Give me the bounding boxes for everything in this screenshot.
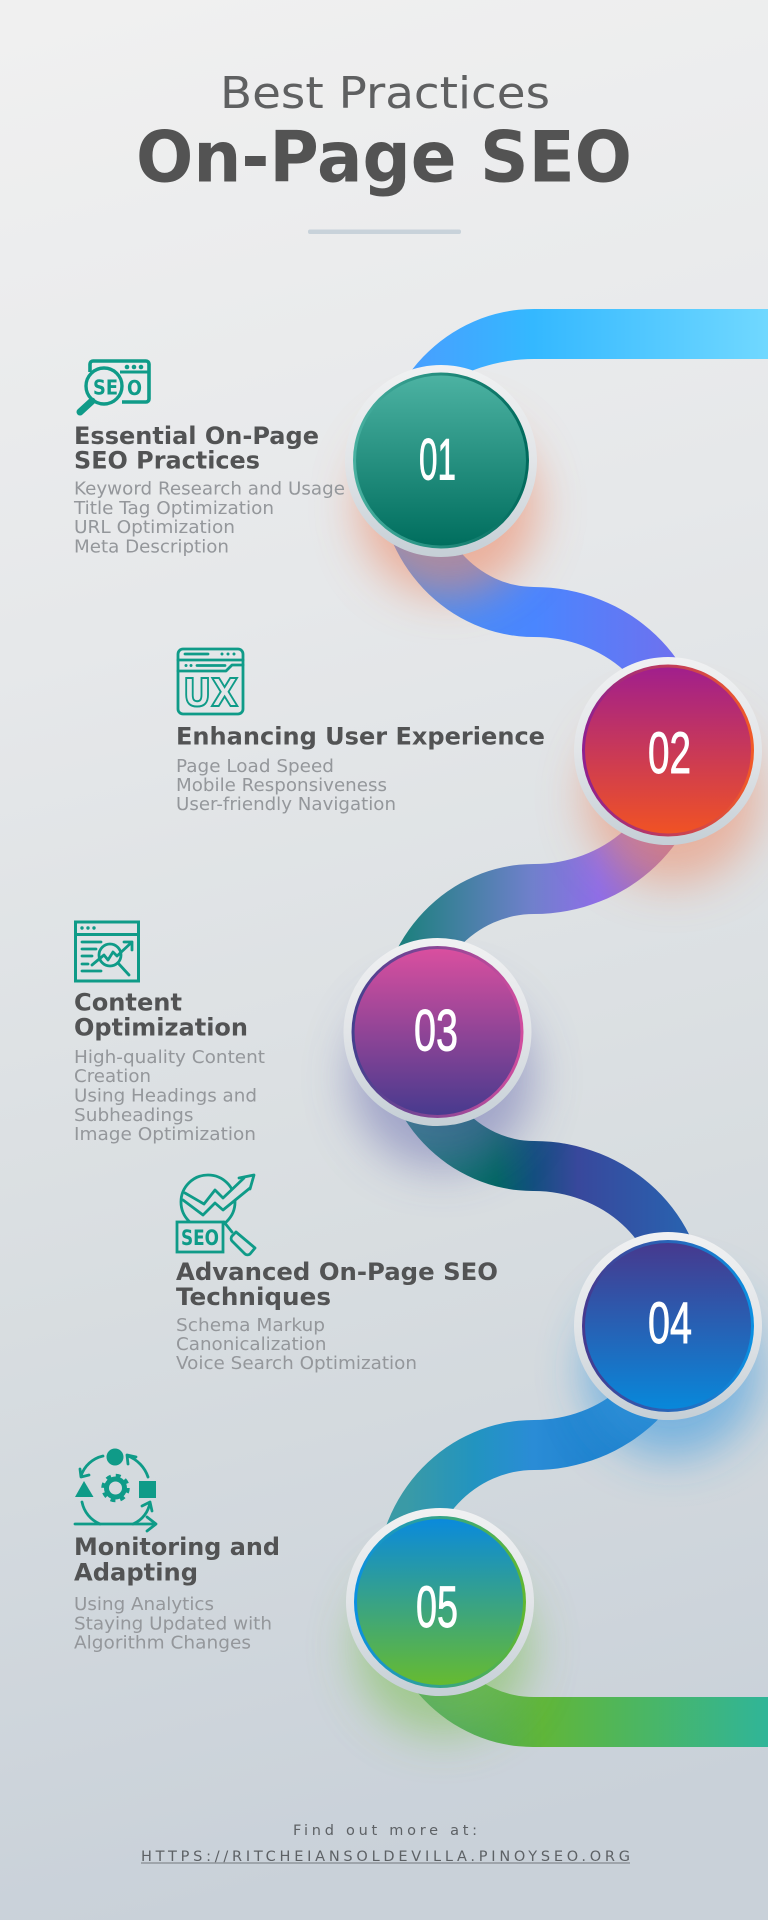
step 03 circle: [344, 938, 532, 1126]
text block: Algorithm Changes: [74, 1632, 251, 1654]
step 05 circle: [346, 1508, 534, 1696]
text block: Mobile Responsiveness: [176, 775, 387, 796]
title: On-Page SEO: [136, 116, 632, 198]
icon: process cycle with gear: [75, 1448, 156, 1531]
step 04 circle: [574, 1232, 762, 1420]
text block: URL Optimization: [74, 517, 235, 538]
text block: Meta Description: [74, 536, 229, 558]
text block: [176, 756, 396, 815]
text block: Using Headings and: [74, 1086, 257, 1106]
heading: Enhancing User Experience: [176, 722, 545, 750]
step 01 circle: 01: [419, 428, 456, 492]
step 03 circle: 03: [414, 998, 458, 1064]
heading: Techniques: [176, 1283, 331, 1311]
panel: essential practices: [73, 361, 345, 558]
step 05 circle: 05: [416, 1575, 458, 1640]
icon: SEO growth globe: [177, 1175, 255, 1255]
ribbon: winding path: [376, 309, 768, 1747]
heading: Optimization: [74, 1014, 248, 1042]
heading: Monitoring and: [74, 1533, 280, 1561]
icon: SEO magnifier window: SE: [93, 376, 118, 400]
heading: [74, 1533, 280, 1586]
text block: Subheadings: [74, 1105, 194, 1126]
panel: monitoring: [74, 1448, 280, 1654]
heading: Essential On-Page: [74, 422, 319, 450]
footer: [141, 1823, 630, 1865]
step 01 circle: [345, 365, 537, 557]
step 02 circle: [574, 657, 762, 845]
text block: Using Analytics: [74, 1594, 214, 1615]
step 04 circle: 04: [648, 1291, 692, 1356]
text block: High-quality Content: [74, 1047, 265, 1068]
heading: SEO Practices: [74, 446, 260, 474]
panel: content optimization: [74, 922, 265, 1145]
footer: HTTPS://RITCHEIANSOLDEVILLA.PINOYSEO.ORG: [141, 1849, 630, 1865]
text block: Keyword Research and Usage: [74, 478, 345, 500]
icon: UX window: UX: [183, 671, 238, 715]
text block: Title Tag Optimization: [73, 498, 274, 519]
step 02 circle: 02: [648, 721, 691, 786]
text block: Page Load Speed: [176, 756, 334, 777]
text block: Image Optimization: [74, 1124, 256, 1145]
heading: [74, 422, 319, 474]
footer: Find out more at:: [293, 1823, 477, 1839]
text block: Staying Updated with: [74, 1614, 272, 1634]
text block: User-friendly Navigation: [176, 794, 396, 815]
heading: Advanced On-Page SEO: [176, 1258, 498, 1286]
icon: SEO magnifier window: O: [127, 376, 142, 400]
text block: [73, 478, 345, 558]
text block: Voice Search Optimization: [176, 1353, 417, 1374]
icon: chart window: [75, 922, 139, 981]
heading: Adapting: [74, 1558, 198, 1586]
heading: [176, 1258, 498, 1311]
text block: [176, 1315, 417, 1374]
heading: [74, 988, 248, 1042]
text block: Canonicalization: [176, 1334, 326, 1355]
heading: Content: [74, 988, 182, 1016]
text block: [74, 1594, 272, 1654]
text block: Schema Markup: [176, 1315, 325, 1336]
text block: Creation: [74, 1066, 151, 1087]
panel: advanced techniques: [176, 1175, 498, 1374]
title: [136, 68, 632, 198]
icon: SEO growth globe: SEO: [181, 1226, 219, 1250]
text block: [74, 1047, 265, 1145]
icon: SEO magnifier window: [80, 361, 149, 412]
glow: circle shadows: [350, 416, 760, 1735]
panel: user experience: [176, 649, 545, 815]
icon: UX window: [178, 649, 243, 715]
title: Best Practices: [220, 68, 550, 119]
